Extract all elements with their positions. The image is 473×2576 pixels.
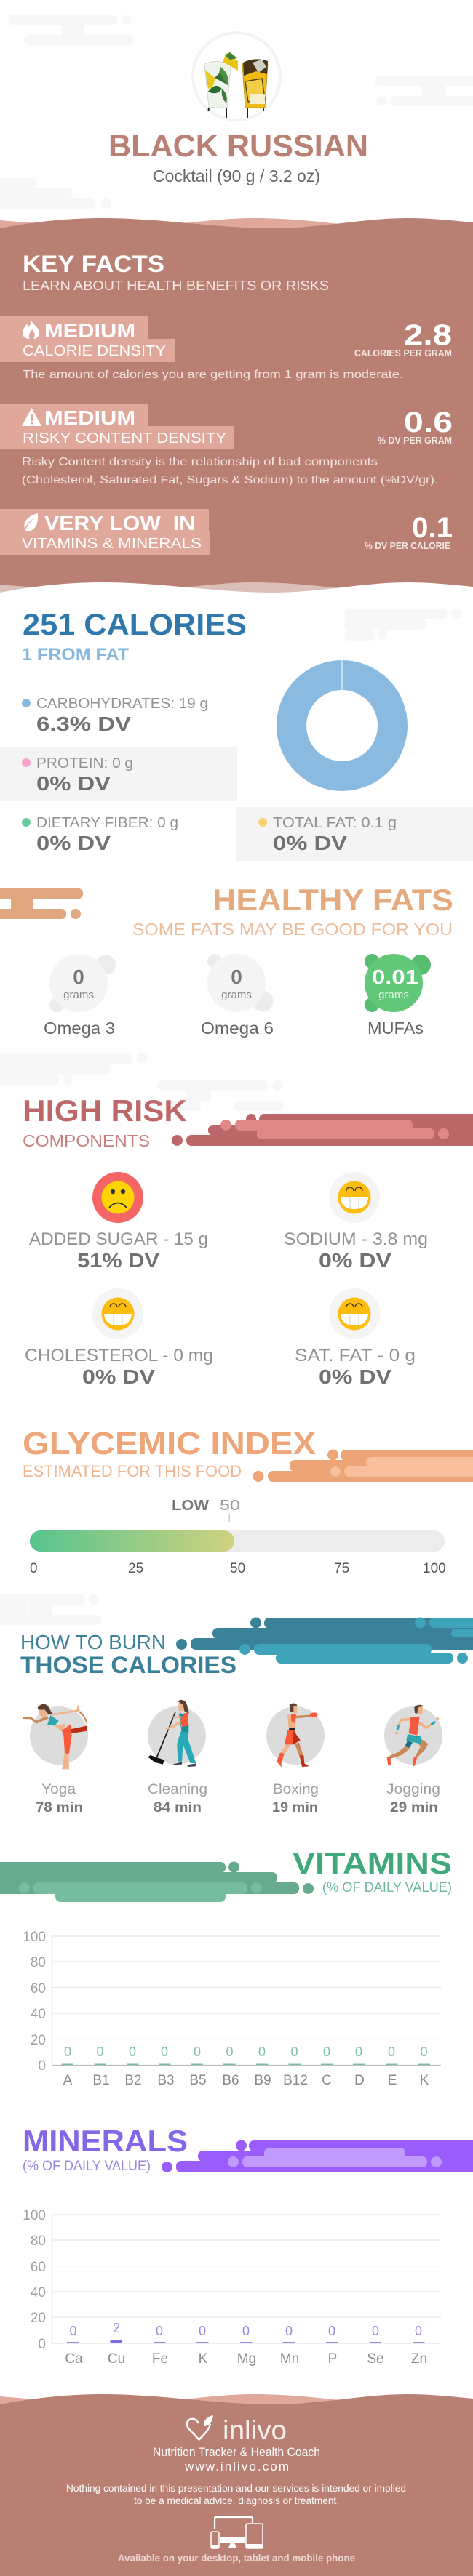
heading: how to burn: HOW TO BURN [20, 1631, 166, 1653]
bar chart: vitamins: 100 [23, 1930, 46, 1945]
bar chart: minerals: 2 [113, 2321, 120, 2335]
legend: protein [0, 747, 237, 801]
bar chart: vitamins: 0 [323, 2045, 330, 2059]
bar chart: minerals: 0 [38, 2337, 46, 2352]
activity: jogging [384, 1705, 442, 1815]
icon: leaf [24, 513, 38, 531]
background cloud: burn [0, 1594, 101, 1625]
availability note: Available on your desktop, tablet and mobile phone [118, 2553, 355, 2564]
bar chart: minerals: 0 [69, 2324, 77, 2338]
icon: right amber glass [242, 59, 268, 118]
bar chart: vitamins: B5 [189, 2073, 207, 2088]
bar chart: minerals: 60 [31, 2260, 46, 2275]
stat: omega 3 [44, 954, 116, 1038]
bar chart: vitamins: 0 [129, 2045, 136, 2059]
stat: omega 3: grams [63, 989, 94, 1001]
icon: jogging figure [387, 1705, 439, 1766]
scale labels: 50 [230, 1561, 245, 1576]
bar chart: vitamins: 0 [226, 2045, 234, 2059]
legend: total fat: TOTAL FAT: 0.1 g [273, 815, 397, 831]
heading: those calories: THOSE CALORIES [20, 1652, 236, 1678]
risk: cholesterol: CHOLESTEROL - 0 mg [25, 1346, 213, 1365]
website link: www.inlivo.com [184, 2460, 289, 2473]
icon: yoga figure [23, 1704, 87, 1769]
icon: grinning face [329, 1288, 380, 1339]
glycemic index scale [30, 1498, 446, 1576]
bar chart: vitamins: 0 [194, 2045, 201, 2059]
tagline: Nutrition Tracker & Health Coach [153, 2445, 320, 2459]
label: RISKY CONTENT DENSITY [23, 430, 226, 446]
risk: added sugar: 51% DV [77, 1249, 159, 1272]
bar chart: minerals: 0 [242, 2324, 250, 2338]
bar chart: vitamins: 0 [290, 2045, 298, 2059]
background cloud: top left [8, 15, 134, 45]
bar chart: vitamins: K [420, 2073, 429, 2088]
heading: key facts: KEY FACTS [23, 251, 164, 277]
bar chart: vitamins: 0 [355, 2045, 362, 2059]
fact: vitamins and minerals [0, 509, 453, 555]
bar chart: vitamins: B9 [254, 2073, 271, 2088]
heading: healthy fats: HEALTHY FATS [212, 883, 453, 917]
bar chart: vitamins: 0 [258, 2045, 266, 2059]
legend: dietary fiber: 0% DV [36, 832, 111, 854]
label: CALORIE DENSITY [23, 343, 166, 359]
risk: sodium [284, 1172, 428, 1272]
background cloud: calories [344, 609, 461, 641]
icon: sad face [92, 1172, 143, 1223]
rating: MEDIUM [44, 406, 135, 429]
heading: minerals: MINERALS [23, 2124, 188, 2158]
risk: cholesterol: 0% DV [82, 1365, 155, 1388]
risk: saturated fat [295, 1288, 416, 1388]
legend: total fat: 0% DV [273, 832, 347, 854]
stat: MUFAs: MUFAs [367, 1019, 424, 1038]
background cloud: left of title [0, 178, 111, 209]
legend: carbohydrates: CARBOHYDRATES: 19 g [36, 696, 208, 712]
stat: omega 3: 0 [73, 966, 84, 988]
bar chart: minerals: 100 [23, 2208, 46, 2223]
legend: dietary fiber [22, 815, 178, 854]
bar chart: vitamins: 0 [38, 2058, 46, 2074]
donut chart [291, 659, 393, 777]
activity: boxing [266, 1703, 325, 1815]
unit: CALORIES PER GRAM [354, 348, 452, 358]
rating: VERY LOW IN [44, 512, 195, 534]
value: 0.6 [404, 406, 453, 438]
stat: omega 6: grams [221, 989, 252, 1001]
stat: MUFAs: grams [378, 989, 409, 1001]
marker value: 50 [220, 1498, 240, 1514]
risk: cholesterol [25, 1288, 213, 1388]
bar chart: vitamins: 0 [96, 2045, 104, 2059]
stat: omega 3: Omega 3 [44, 1019, 115, 1038]
bar chart: vitamins: E [388, 2073, 397, 2088]
bar chart: minerals: 0 [156, 2324, 163, 2338]
icon: cleaning figure [148, 1700, 196, 1767]
bar chart: minerals [23, 2208, 441, 2367]
subheading: LEARN ABOUT HEALTH BENEFITS OR RISKS [23, 278, 329, 293]
bar chart: vitamins: C [322, 2073, 332, 2088]
risk: sodium: 0% DV [319, 1249, 391, 1272]
subtitle: Cocktail (90 g / 3.2 oz) [153, 166, 320, 185]
bar chart: minerals: K [199, 2351, 208, 2367]
bar chart: minerals: P [328, 2351, 337, 2367]
activity: boxing: 19 min [272, 1800, 318, 1815]
stat: MUFAs: 0.01 [372, 966, 418, 988]
title: BLACK RUSSIAN [108, 129, 368, 164]
icon: inlivo heart logo [187, 2415, 213, 2440]
subheading: calories from fat: 1 FROM FAT [22, 645, 129, 665]
scale labels: 100 [423, 1561, 446, 1576]
risk: saturated fat: SAT. FAT - 0 g [295, 1346, 416, 1365]
panel: footer [0, 2394, 473, 2576]
bar chart: vitamins: B12 [283, 2073, 308, 2088]
legend: protein: PROTEIN: 0 g [36, 755, 133, 771]
unit: % DV PER CALORIE [365, 541, 450, 551]
risk: sodium: SODIUM - 3.8 mg [284, 1229, 428, 1249]
legend: dietary fiber: DIETARY FIBER: 0 g [36, 815, 178, 831]
bar chart: vitamins: B2 [124, 2073, 142, 2088]
bar chart: minerals: Mn [280, 2351, 299, 2367]
subheading: estimated: ESTIMATED FOR THIS FOOD [23, 1462, 242, 1480]
legend: protein: 0% DV [36, 772, 111, 795]
legend: carbohydrates: 6.3% DV [36, 713, 131, 735]
unit: % DV PER GRAM [378, 436, 452, 446]
background cloud: top right [375, 76, 473, 106]
stat: omega 6 [201, 954, 274, 1038]
activity: jogging: 29 min [390, 1800, 438, 1815]
bar chart: vitamins: B3 [157, 2073, 175, 2088]
scale labels: 0 [30, 1561, 38, 1576]
bar chart: vitamins: B1 [92, 2073, 110, 2088]
activity: cleaning [148, 1700, 207, 1815]
bar chart: minerals: Ca [65, 2351, 83, 2367]
subheading: components: COMPONENTS [23, 1131, 150, 1150]
bar chart: minerals: 20 [31, 2311, 46, 2326]
bar chart: vitamins: D [354, 2073, 365, 2088]
stat: omega 6: Omega 6 [201, 1019, 274, 1038]
bar chart: vitamins: 20 [31, 2033, 46, 2048]
stat: omega 6: 0 [231, 966, 242, 988]
bar chart: minerals: Zn [411, 2351, 427, 2367]
track [30, 1530, 445, 1552]
heading: high risk: HIGH RISK [23, 1094, 187, 1128]
label: VITAMINS & MINERALS [22, 536, 202, 552]
bar chart: minerals: 0 [285, 2324, 293, 2338]
bar chart: minerals: 0 [328, 2324, 335, 2338]
risk: added sugar [29, 1172, 208, 1272]
bar chart: minerals: 0 [372, 2324, 379, 2338]
scale labels: 25 [128, 1561, 143, 1576]
description line 2: (Cholesterol, Saturated Fat, Sugars & Sodium) to the amount (%DV/gr). [22, 474, 438, 486]
panel: key facts [0, 218, 473, 606]
bar chart: vitamins: 0 [161, 2045, 168, 2059]
bar chart: minerals: Fe [152, 2351, 168, 2367]
icon: devices [211, 2517, 263, 2548]
bar chart: minerals: Mg [237, 2351, 256, 2367]
bar chart: vitamins: 80 [31, 1955, 46, 1970]
activity: jogging: Jogging [386, 1782, 440, 1797]
decoration: glycemic bars [253, 1450, 473, 1482]
decoration: minerals bars [162, 2140, 473, 2172]
disclaimer line 1: Nothing contained in this presentation and our services is intended or implied [66, 2483, 406, 2494]
bar chart: minerals: 0 [199, 2324, 206, 2338]
bar chart: vitamins: 60 [31, 1981, 46, 1997]
subheading: minerals: (% OF DAILY VALUE) [23, 2159, 151, 2174]
drink image in circle [193, 33, 280, 120]
subheading: vitamins: (% OF DAILY VALUE) [322, 1880, 452, 1895]
activity: yoga: Yoga [41, 1782, 76, 1797]
icon: flame [23, 320, 39, 339]
fill [30, 1530, 234, 1552]
activity: cleaning: 84 min [154, 1800, 202, 1815]
heading: calories: 251 CALORIES [23, 607, 247, 641]
decoration: burn bars [176, 1617, 473, 1664]
icon: boxing figure [277, 1703, 318, 1768]
background clouds: high risk [0, 1053, 284, 1111]
bar chart: minerals: 40 [31, 2285, 46, 2300]
description: Risky Content density is the relationship of bad components [22, 456, 378, 468]
legend: total fat [236, 807, 473, 861]
legend: carbohydrates [22, 696, 208, 735]
value: 2.8 [404, 319, 452, 351]
icon: grinning face [329, 1172, 380, 1223]
risk: added sugar: ADDED SUGAR - 15 g [29, 1229, 208, 1249]
description: The amount of calories you are getting from 1 gram is moderate. [23, 369, 403, 381]
heading: glycemic index: GLYCEMIC INDEX [23, 1426, 316, 1461]
bar chart: vitamins [23, 1930, 441, 2088]
fact: calorie density [0, 316, 452, 381]
logo wordmark: inlivo [223, 2415, 287, 2445]
value: 0.1 [412, 512, 453, 544]
marker label: LOW [172, 1498, 209, 1514]
subheading: healthy fats: SOME FATS MAY BE GOOD FOR YOU [132, 920, 453, 939]
activity: yoga: 78 min [36, 1800, 83, 1815]
bar chart: vitamins: 0 [64, 2045, 71, 2059]
bar chart: vitamins: A [63, 2073, 73, 2088]
scale labels: 75 [334, 1561, 349, 1576]
rating: MEDIUM [44, 319, 135, 342]
scale labels [30, 1561, 446, 1576]
decoration: healthy fats bars [0, 888, 83, 919]
icon: left glass with mint [204, 52, 238, 118]
bar chart: minerals: Cu [108, 2351, 125, 2367]
bar chart: vitamins: 0 [388, 2045, 395, 2059]
stat: MUFAs [365, 954, 431, 1038]
icon: grinning face [92, 1288, 143, 1339]
bar chart: vitamins: 0 [420, 2045, 428, 2059]
activity: cleaning: Cleaning [148, 1782, 207, 1797]
icon: warning triangle [22, 408, 41, 426]
heading: vitamins: VITAMINS [293, 1846, 452, 1880]
disclaimer line 2: to be a medical advice, diagnosis or treatment. [134, 2495, 339, 2506]
bar chart: minerals: Se [367, 2351, 384, 2367]
bar chart: minerals: 80 [31, 2234, 46, 2249]
risk: saturated fat: 0% DV [319, 1365, 391, 1388]
bar chart: minerals: 0 [415, 2324, 422, 2338]
activity: yoga [23, 1704, 88, 1815]
activity: boxing: Boxing [273, 1782, 319, 1797]
decoration: vitamins bars [0, 1861, 314, 1902]
bar chart: vitamins: 40 [31, 2007, 46, 2022]
bar chart: vitamins: B6 [222, 2073, 239, 2088]
fact: risky content density [0, 404, 453, 486]
decoration: high risk bars [172, 1114, 473, 1146]
